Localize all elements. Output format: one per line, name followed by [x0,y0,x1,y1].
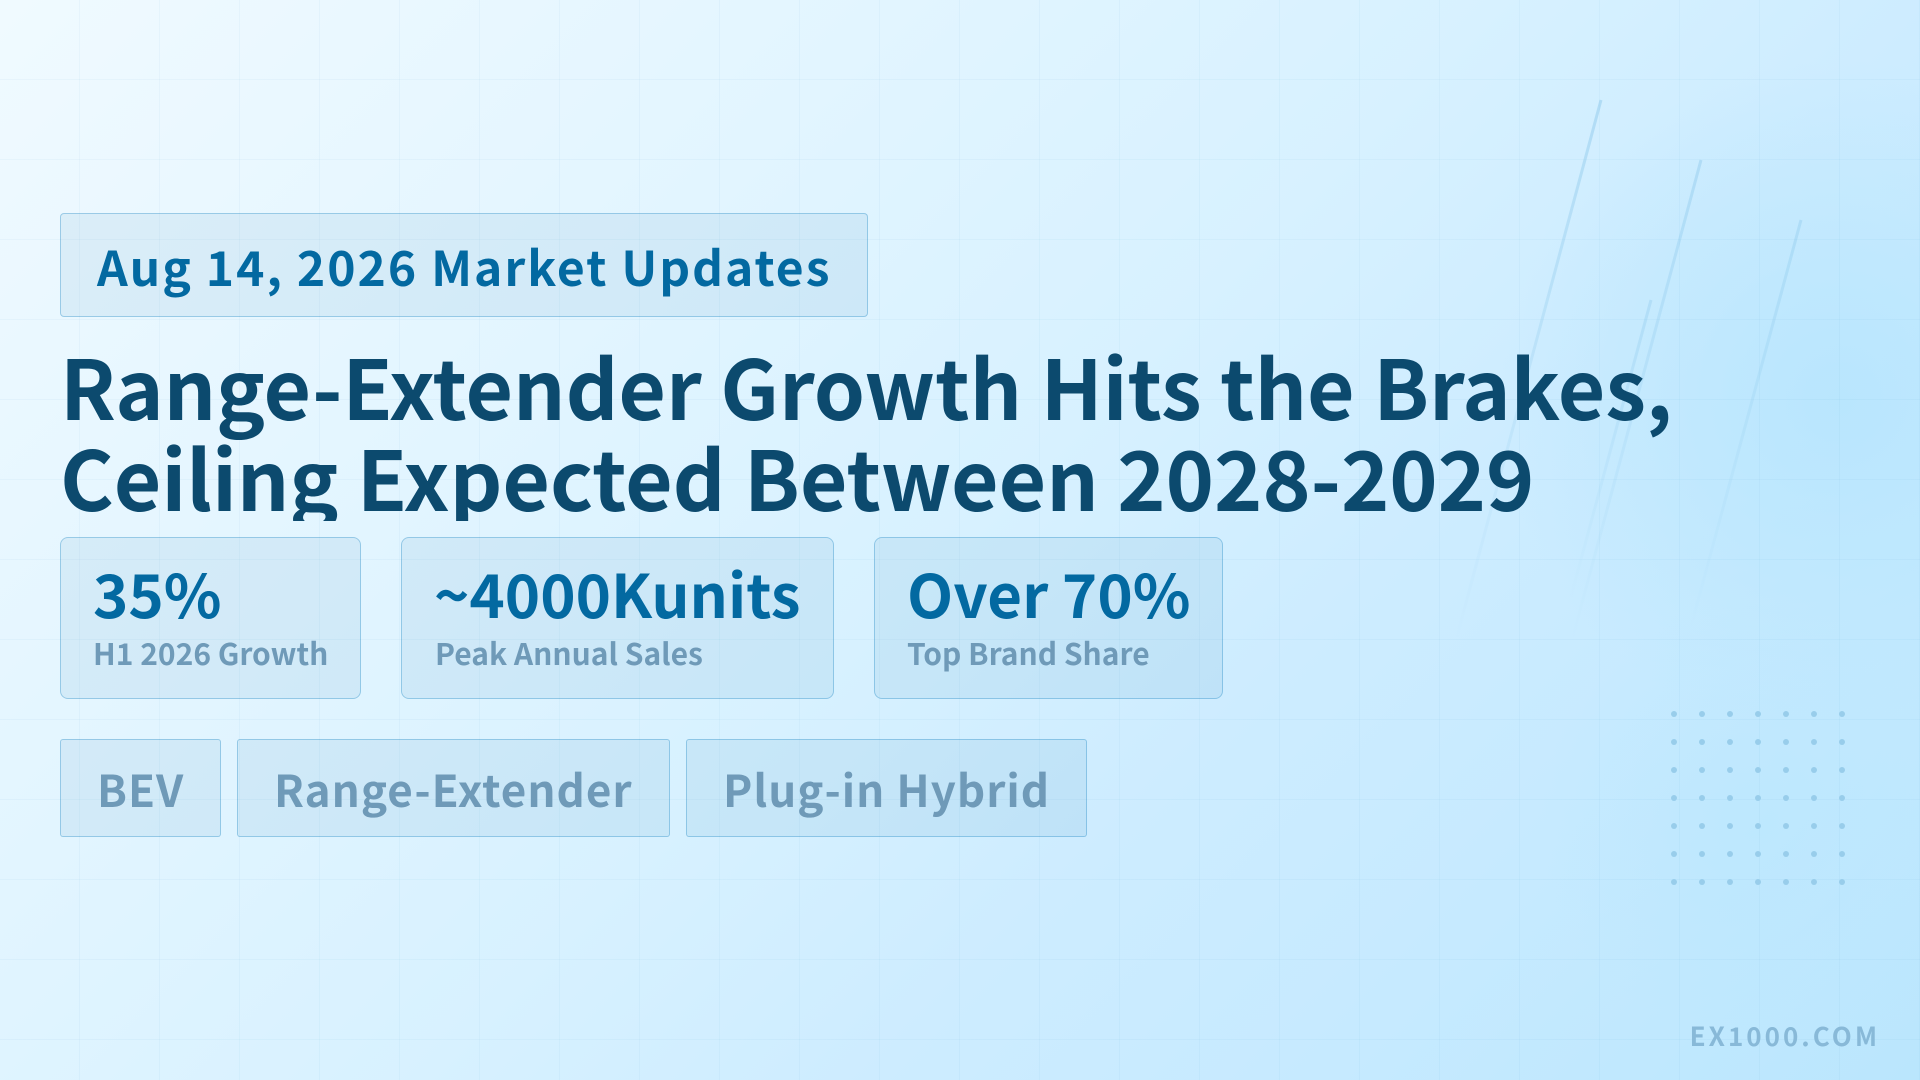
tag: BEV [60,739,221,837]
value: 35% [93,549,222,636]
dot matrix decoration [1671,711,1845,885]
stat card: H1 growth [60,537,361,699]
label: Peak Annual Sales [435,630,703,674]
title [60,340,1672,521]
tag: BEV: BEV [97,756,184,820]
tag: Range-Extender [237,739,670,837]
date badge: Aug 14, 2026 Market Updates [97,230,831,300]
tag: Plug-in Hybrid: Plug-in Hybrid [723,756,1050,820]
label: H1 2026 Growth [93,630,328,674]
stat card: brand share [874,537,1223,699]
tag: Plug-in Hybrid [686,739,1087,837]
value: Over 70% [907,549,1190,636]
stat card: peak sales [401,537,834,699]
footer watermark: EX1000.COM [1690,1017,1880,1054]
value: ~4000Kunits [434,549,800,636]
tag: Range-Extender: Range-Extender [274,756,633,820]
date badge [60,213,868,317]
label: Top Brand Share [907,630,1150,674]
